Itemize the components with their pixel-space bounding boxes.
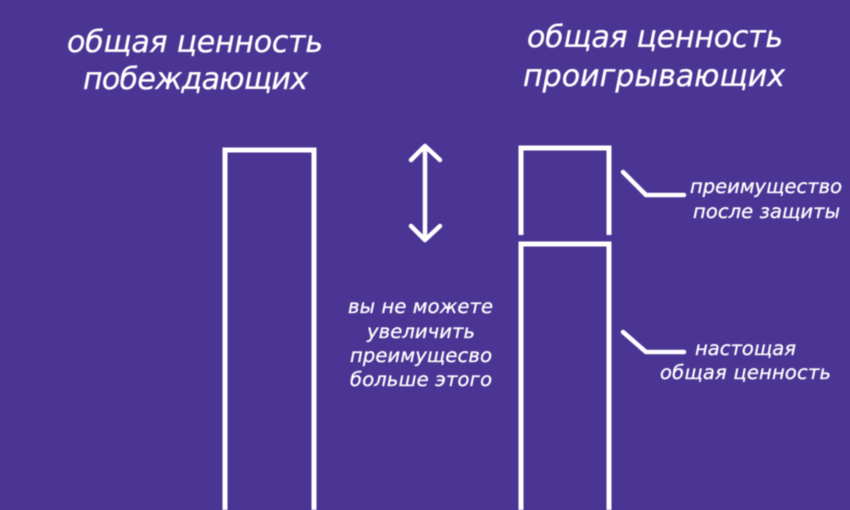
bar: real total value: [521, 244, 609, 510]
heading: losers total value: проигрывающих: [523, 59, 785, 94]
center text: limit note: больше этого: [350, 368, 492, 391]
center text: limit note: [348, 295, 493, 391]
callout text: advantage: после защиты: [693, 200, 840, 223]
center text: limit note: вы не можете: [348, 295, 493, 318]
callout text: real value: общая ценность: [660, 361, 831, 384]
callout text: advantage: преимущество: [690, 175, 842, 198]
heading: winners total value: побеждающих: [83, 62, 308, 97]
callout line: advantage: [623, 172, 684, 195]
heading: losers total value: общая ценность: [527, 20, 783, 55]
double arrow: [411, 146, 440, 240]
bar: winners: [225, 150, 314, 510]
center text: limit note: увеличить: [366, 320, 475, 343]
callout text: real value: настощая: [695, 337, 796, 360]
center text: limit note: преимущесво: [350, 344, 492, 367]
heading: losers total value: [523, 20, 785, 94]
bar: advantage after protection: [521, 148, 609, 235]
callout line: real value: [623, 332, 684, 352]
heading: winners total value: общая ценность: [67, 25, 323, 60]
heading: winners total value: [67, 25, 323, 97]
callout text: real value: [660, 337, 831, 384]
callout text: advantage: [690, 175, 842, 223]
